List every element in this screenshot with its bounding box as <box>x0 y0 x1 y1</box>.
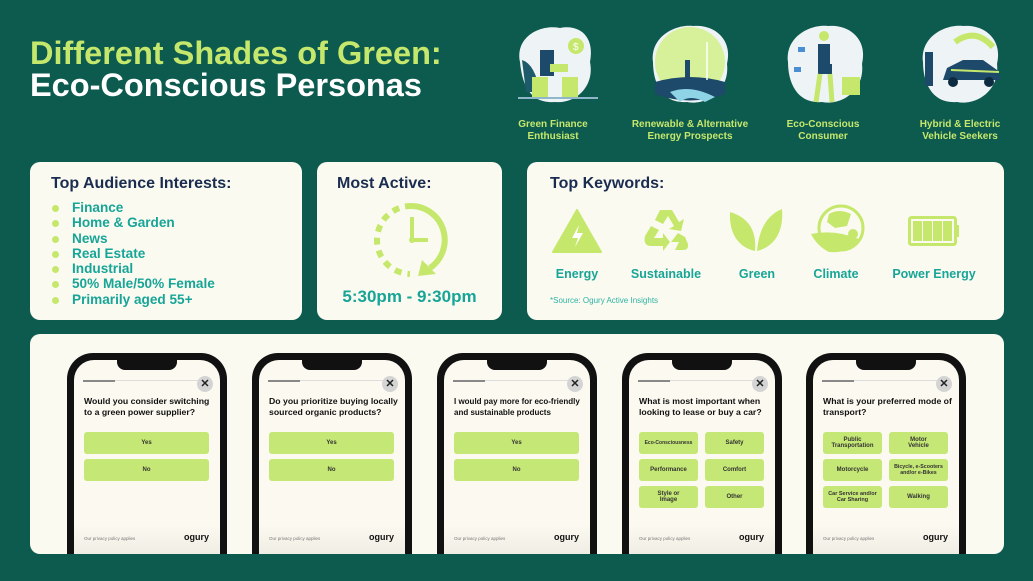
phone 4: Style or <box>657 490 680 496</box>
label: Renewable & Alternative <box>632 119 748 130</box>
label: Enthusiast <box>527 131 579 142</box>
phone 4: Our privacy policy applies <box>639 536 690 541</box>
icon: energy <box>552 209 602 253</box>
label <box>632 119 748 142</box>
persona: eco consumer <box>787 26 864 142</box>
label: Consumer <box>798 131 848 142</box>
illustration: renewable <box>652 26 728 103</box>
panel: top keywords <box>527 162 1004 320</box>
heading: Top Keywords: <box>550 175 664 192</box>
keyword labels: Climate <box>813 267 859 281</box>
interest list: Industrial <box>72 261 133 276</box>
phone 4: Image <box>660 497 677 503</box>
interest list: Primarily aged 55+ <box>72 292 193 307</box>
persona: EV <box>920 26 1001 142</box>
phone 5: Walking <box>907 494 930 500</box>
interest list: News <box>72 231 108 246</box>
icon: leaves <box>730 209 782 251</box>
keyword labels: Energy <box>556 267 598 281</box>
phone 5: Public <box>843 436 862 442</box>
label: Energy Prospects <box>647 131 733 142</box>
phone 4: ogury <box>739 532 764 542</box>
icon: battery <box>908 216 959 246</box>
interest list <box>52 200 215 307</box>
label: Green Finance <box>518 119 588 130</box>
illustration: finance <box>518 27 598 102</box>
interest list: Real Estate <box>72 246 145 261</box>
phone 1: ✕ <box>200 378 210 390</box>
keyword labels: Sustainable <box>631 267 701 281</box>
phone 5: ✕ <box>939 378 949 390</box>
phone 5: and/or e-Bikes <box>900 470 937 476</box>
phone 4: Safety <box>725 440 744 446</box>
phone 5: ogury <box>923 532 948 542</box>
phone 1 <box>67 353 227 581</box>
phone 3: ✕ <box>570 378 580 390</box>
phone 3: ogury <box>554 532 579 542</box>
icon: clock <box>374 203 448 277</box>
phone 1: No <box>142 467 150 473</box>
phone 4: Performance <box>650 467 687 473</box>
phone 2: Do you prioritize buying locally sourced organic products? <box>269 396 398 417</box>
label: Eco-Conscious <box>787 119 859 130</box>
phone 4: Comfort <box>723 467 746 473</box>
phone 4: ✕ <box>755 378 765 390</box>
label <box>787 119 859 142</box>
illustration: finance: $ <box>573 42 579 53</box>
label: Hybrid & Electric <box>920 119 1000 130</box>
phone 2: ogury <box>369 532 394 542</box>
icon: recycle <box>644 210 688 251</box>
label <box>920 119 1000 142</box>
time: 5:30pm - 9:30pm <box>342 287 477 306</box>
phone 2 <box>252 353 412 581</box>
interest list: Finance <box>72 200 123 215</box>
label: Vehicle Seekers <box>922 131 998 142</box>
title <box>30 35 442 103</box>
phone 5 <box>806 353 966 581</box>
panel: survey phones <box>30 334 1004 554</box>
title: Different Shades of Green: <box>30 35 442 71</box>
panel: top audience interests <box>30 162 302 320</box>
heading: Most Active: <box>337 175 432 192</box>
phone 5: Motorcycle <box>837 467 868 473</box>
phone 3: Yes <box>511 440 522 446</box>
phone 5: Car Service and/or <box>828 490 877 496</box>
phone 5: Transportation <box>831 443 874 449</box>
phone 1: ogury <box>184 532 209 542</box>
phone 2: Our privacy policy applies <box>269 536 320 541</box>
phone 2: Yes <box>326 440 337 446</box>
icon: globe <box>811 204 864 252</box>
phone 3: Our privacy policy applies <box>454 536 505 541</box>
phone 5: Car Sharing <box>837 497 868 503</box>
heading: Top Audience Interests: <box>51 175 231 192</box>
phone 3: No <box>512 467 520 473</box>
keyword labels <box>556 267 976 281</box>
label <box>518 119 588 142</box>
persona: renewable <box>632 26 748 142</box>
phone 5: What is your preferred mode of transport? <box>823 396 952 417</box>
illustration: car <box>922 26 1001 103</box>
phone 5: Our privacy policy applies <box>823 536 874 541</box>
interest list: Home & Garden <box>72 215 175 230</box>
phone 3: I would pay more for eco-friendly and sustainable products <box>454 397 580 417</box>
phone 3 <box>437 353 597 581</box>
keyword labels: Green <box>739 267 775 281</box>
keyword labels: Power Energy <box>892 267 976 281</box>
phone 4: Eco-Consciousness <box>645 440 692 446</box>
title: Eco-Conscious Personas <box>30 67 422 103</box>
phone 2: ✕ <box>385 378 395 390</box>
phone 5: Vehicle <box>908 443 929 449</box>
persona: green finance <box>518 27 598 142</box>
phone 4: Other <box>726 494 742 500</box>
interest list: 50% Male/50% Female <box>72 276 215 291</box>
phone 4 <box>622 353 782 581</box>
phone 2: No <box>328 467 336 473</box>
phone 5: Bicycle, e-Scooters <box>894 464 943 470</box>
phone 1: Our privacy policy applies <box>84 536 135 541</box>
panel: most active <box>317 162 502 320</box>
phone 5: Motor <box>910 436 927 442</box>
phone 1: Would you consider switching to a green power supplier? <box>84 396 209 417</box>
illustration: consumer <box>788 26 864 103</box>
phone 1: Yes <box>141 440 152 446</box>
phone 4: What is most important when looking to lease or buy a car? <box>639 396 762 417</box>
source note: *Source: Ogury Active Insights <box>550 296 658 305</box>
